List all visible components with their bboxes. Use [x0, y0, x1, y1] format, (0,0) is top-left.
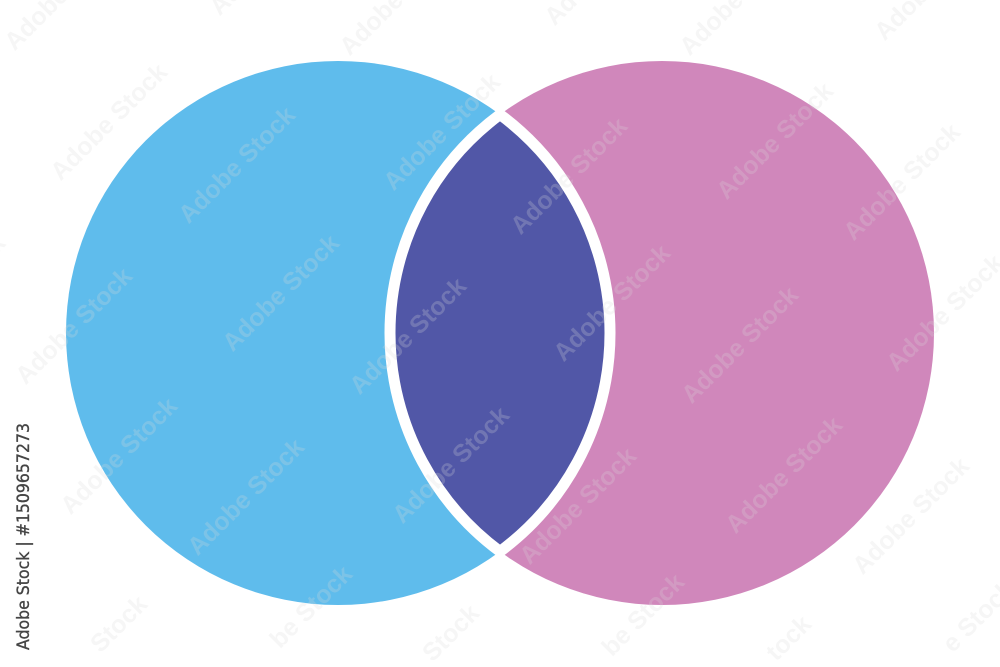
watermark pattern: Adobe Stock	[505, 112, 633, 240]
watermark pattern: Adobe Stock	[10, 262, 138, 390]
side credit text: Adobe Stock | #1509657273	[14, 423, 34, 650]
watermark pattern: tock	[761, 610, 817, 666]
watermark pattern: Adobe Stock	[720, 411, 848, 539]
watermark pattern: Stock	[85, 590, 153, 658]
watermark pattern: Adobe Stock	[514, 442, 642, 570]
watermark pattern: Adobe Stock	[378, 68, 506, 196]
watermark pattern: Adobe Stock	[344, 272, 472, 400]
watermark pattern: Adobe Stock	[676, 281, 804, 409]
watermark pattern: Stock	[417, 599, 485, 667]
overlap: purple lens with white outline	[390, 114, 610, 552]
watermark pattern: Adobe Stock	[217, 229, 345, 357]
watermark pattern: Adobe Stock	[182, 433, 310, 561]
watermark pattern: be Stock	[596, 568, 690, 662]
watermark pattern: Adobe Stock	[838, 118, 966, 246]
watermark pattern: Adobe Stock	[847, 452, 975, 580]
watermark pattern: Adobe Stock	[45, 58, 173, 186]
watermark pattern: Adobe Stock	[548, 239, 676, 367]
watermark pattern: Adobe Stock	[387, 401, 515, 529]
watermark pattern: Adobe Stock	[55, 392, 183, 520]
circle: right pink	[390, 61, 934, 605]
watermark pattern: Adobe Stock	[173, 101, 301, 229]
watermark pattern: Adobe Stock	[711, 77, 839, 205]
watermark pattern: be Stock	[264, 560, 358, 654]
circle: left blue	[66, 61, 610, 605]
